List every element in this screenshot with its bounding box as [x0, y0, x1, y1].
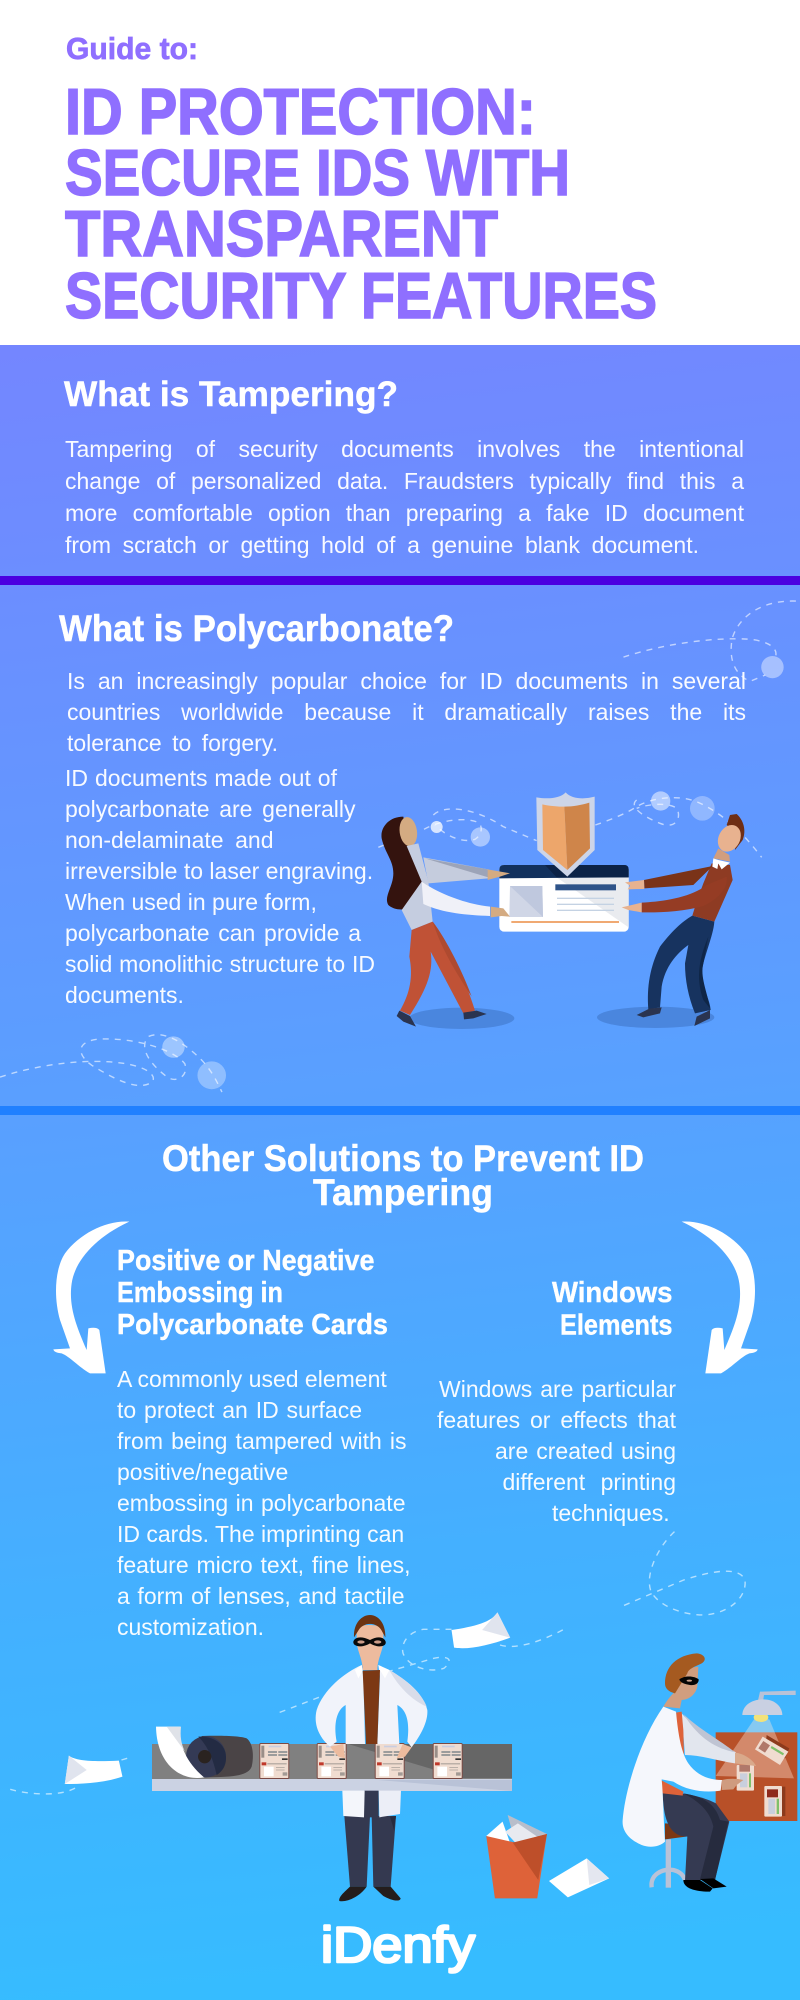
text block: embossing description: a form of lenses, and tactile [117, 1583, 404, 1609]
text block: embossing description: embossing in polycarbonate [117, 1490, 406, 1516]
text block: tampering paragraph: change of personalized data. Fraudsters typically find this a [65, 468, 744, 494]
text block: polycarbonate details: documents. [65, 982, 184, 1008]
subheading: embossing [117, 1245, 388, 1341]
text block: embossing description [117, 1366, 410, 1640]
paper roll [156, 1727, 253, 1778]
text block: embossing description: ID cards. The imprinting can [117, 1521, 404, 1547]
main title: SECURE IDS WITH [65, 136, 570, 209]
main title: TRANSPARENT [65, 197, 498, 270]
dashed flight lines [378, 798, 762, 857]
text block: windows description: are created using [495, 1438, 676, 1464]
text block: polycarbonate details: polycarbonate are generally [65, 796, 356, 822]
text block: polycarbonate details: non-delaminate and [65, 827, 274, 853]
subheading: embossing: Polycarbonate Cards [117, 1309, 388, 1341]
heading: other solutions [162, 1138, 644, 1213]
text block: tampering paragraph: from scratch or getting hold of a genuine blank document. [65, 532, 699, 558]
text block: polycarbonate details: ID documents made out of [65, 765, 337, 791]
heading: other solutions: Other Solutions to Prevent ID [162, 1138, 644, 1179]
text block: polycarbonate details: solid monolithic structure to ID [65, 951, 375, 977]
id card [499, 865, 629, 932]
desk [716, 1732, 797, 1821]
decoration: dashed loop near windows text [623, 1532, 745, 1615]
shield [536, 792, 595, 877]
decoration: dashed lines bottom left [0, 1035, 226, 1092]
logo: iDenfy: iDenfy [321, 1917, 475, 1973]
lamp [742, 1691, 796, 1722]
heading: other solutions: Tampering [313, 1172, 493, 1213]
flying papers [65, 1612, 510, 1784]
main title [65, 75, 657, 332]
cards on desk [737, 1735, 789, 1817]
masked forger at desk with lamp [623, 1653, 797, 1892]
text block: embossing description: to protect an ID surface [117, 1397, 362, 1423]
conveyor belt [152, 1744, 512, 1791]
text block: polycarbonate intro: tolerance to forgery. [67, 730, 278, 756]
text block: polycarbonate intro [67, 668, 746, 756]
subheading: windows elements: Elements [560, 1310, 672, 1342]
text block: polycarbonate details: polycarbonate can provide a [65, 920, 361, 946]
ground shadows [409, 1007, 714, 1029]
main title: SECURITY FEATURES [65, 259, 657, 332]
floating circles [431, 791, 715, 847]
left curved arrow [53, 1222, 129, 1373]
person [623, 1653, 756, 1892]
decoration: dashed lines top right [623, 601, 796, 681]
header titles [65, 31, 657, 332]
man [622, 814, 745, 1026]
heading: what is polycarbonate: What is Polycarbonate? [59, 608, 454, 649]
text block: windows description: features or effects that [437, 1407, 676, 1433]
woman [381, 816, 510, 1027]
guide label: Guide to: [66, 31, 198, 66]
id cards on belt [260, 1744, 462, 1778]
text block: polycarbonate intro: countries worldwide because it dramatically raises the its [67, 699, 746, 725]
text block: embossing description: positive/negative [117, 1459, 288, 1485]
text block: embossing description: A commonly used element [117, 1366, 387, 1392]
subheading: windows elements: Windows [552, 1277, 672, 1309]
heading: what is tampering: What is Tampering? [64, 375, 398, 414]
right curved arrow [682, 1222, 758, 1373]
envelope [549, 1858, 609, 1897]
waste bin with papers [486, 1815, 547, 1898]
lamp light and bulb [716, 1719, 794, 1778]
subheading: embossing: Embossing in [117, 1277, 283, 1309]
main title: ID PROTECTION: [65, 75, 536, 148]
text block: polycarbonate details: When used in pure form, [65, 889, 317, 915]
subheading: windows elements [552, 1277, 672, 1342]
masked forger at conveyor [316, 1615, 427, 1901]
text block: polycarbonate details [65, 765, 375, 1008]
divider bar: blue [0, 1106, 800, 1115]
text block: windows description: different printing [502, 1469, 676, 1495]
illustration: two people pulling an id card with a shield [378, 791, 762, 1029]
stool [652, 1823, 686, 1888]
text block: tampering paragraph [65, 436, 744, 558]
subheading: embossing: Positive or Negative [117, 1245, 374, 1277]
flying dashes [10, 1629, 564, 1794]
divider bar: purple [0, 576, 800, 585]
text block: tampering paragraph: more comfortable option than preparing a fake ID document [65, 500, 744, 526]
text block: tampering paragraph: Tampering of security documents involves the intentional [65, 436, 744, 462]
text block: polycarbonate details: irreversible to laser engraving. [65, 858, 373, 884]
text block: embossing description: customization. [117, 1614, 264, 1640]
text block: polycarbonate intro: Is an increasingly popular choice for ID documents in several [67, 668, 746, 694]
text block: windows description: techniques. [552, 1500, 670, 1526]
illustration: flying papers, bin and envelope [10, 1612, 609, 1898]
text block: windows description [437, 1376, 676, 1526]
text block: embossing description: from being tampered with is [117, 1428, 406, 1454]
text block: windows description: Windows are particular [439, 1376, 676, 1402]
text block: embossing description: feature micro text, fine lines, [117, 1552, 410, 1578]
